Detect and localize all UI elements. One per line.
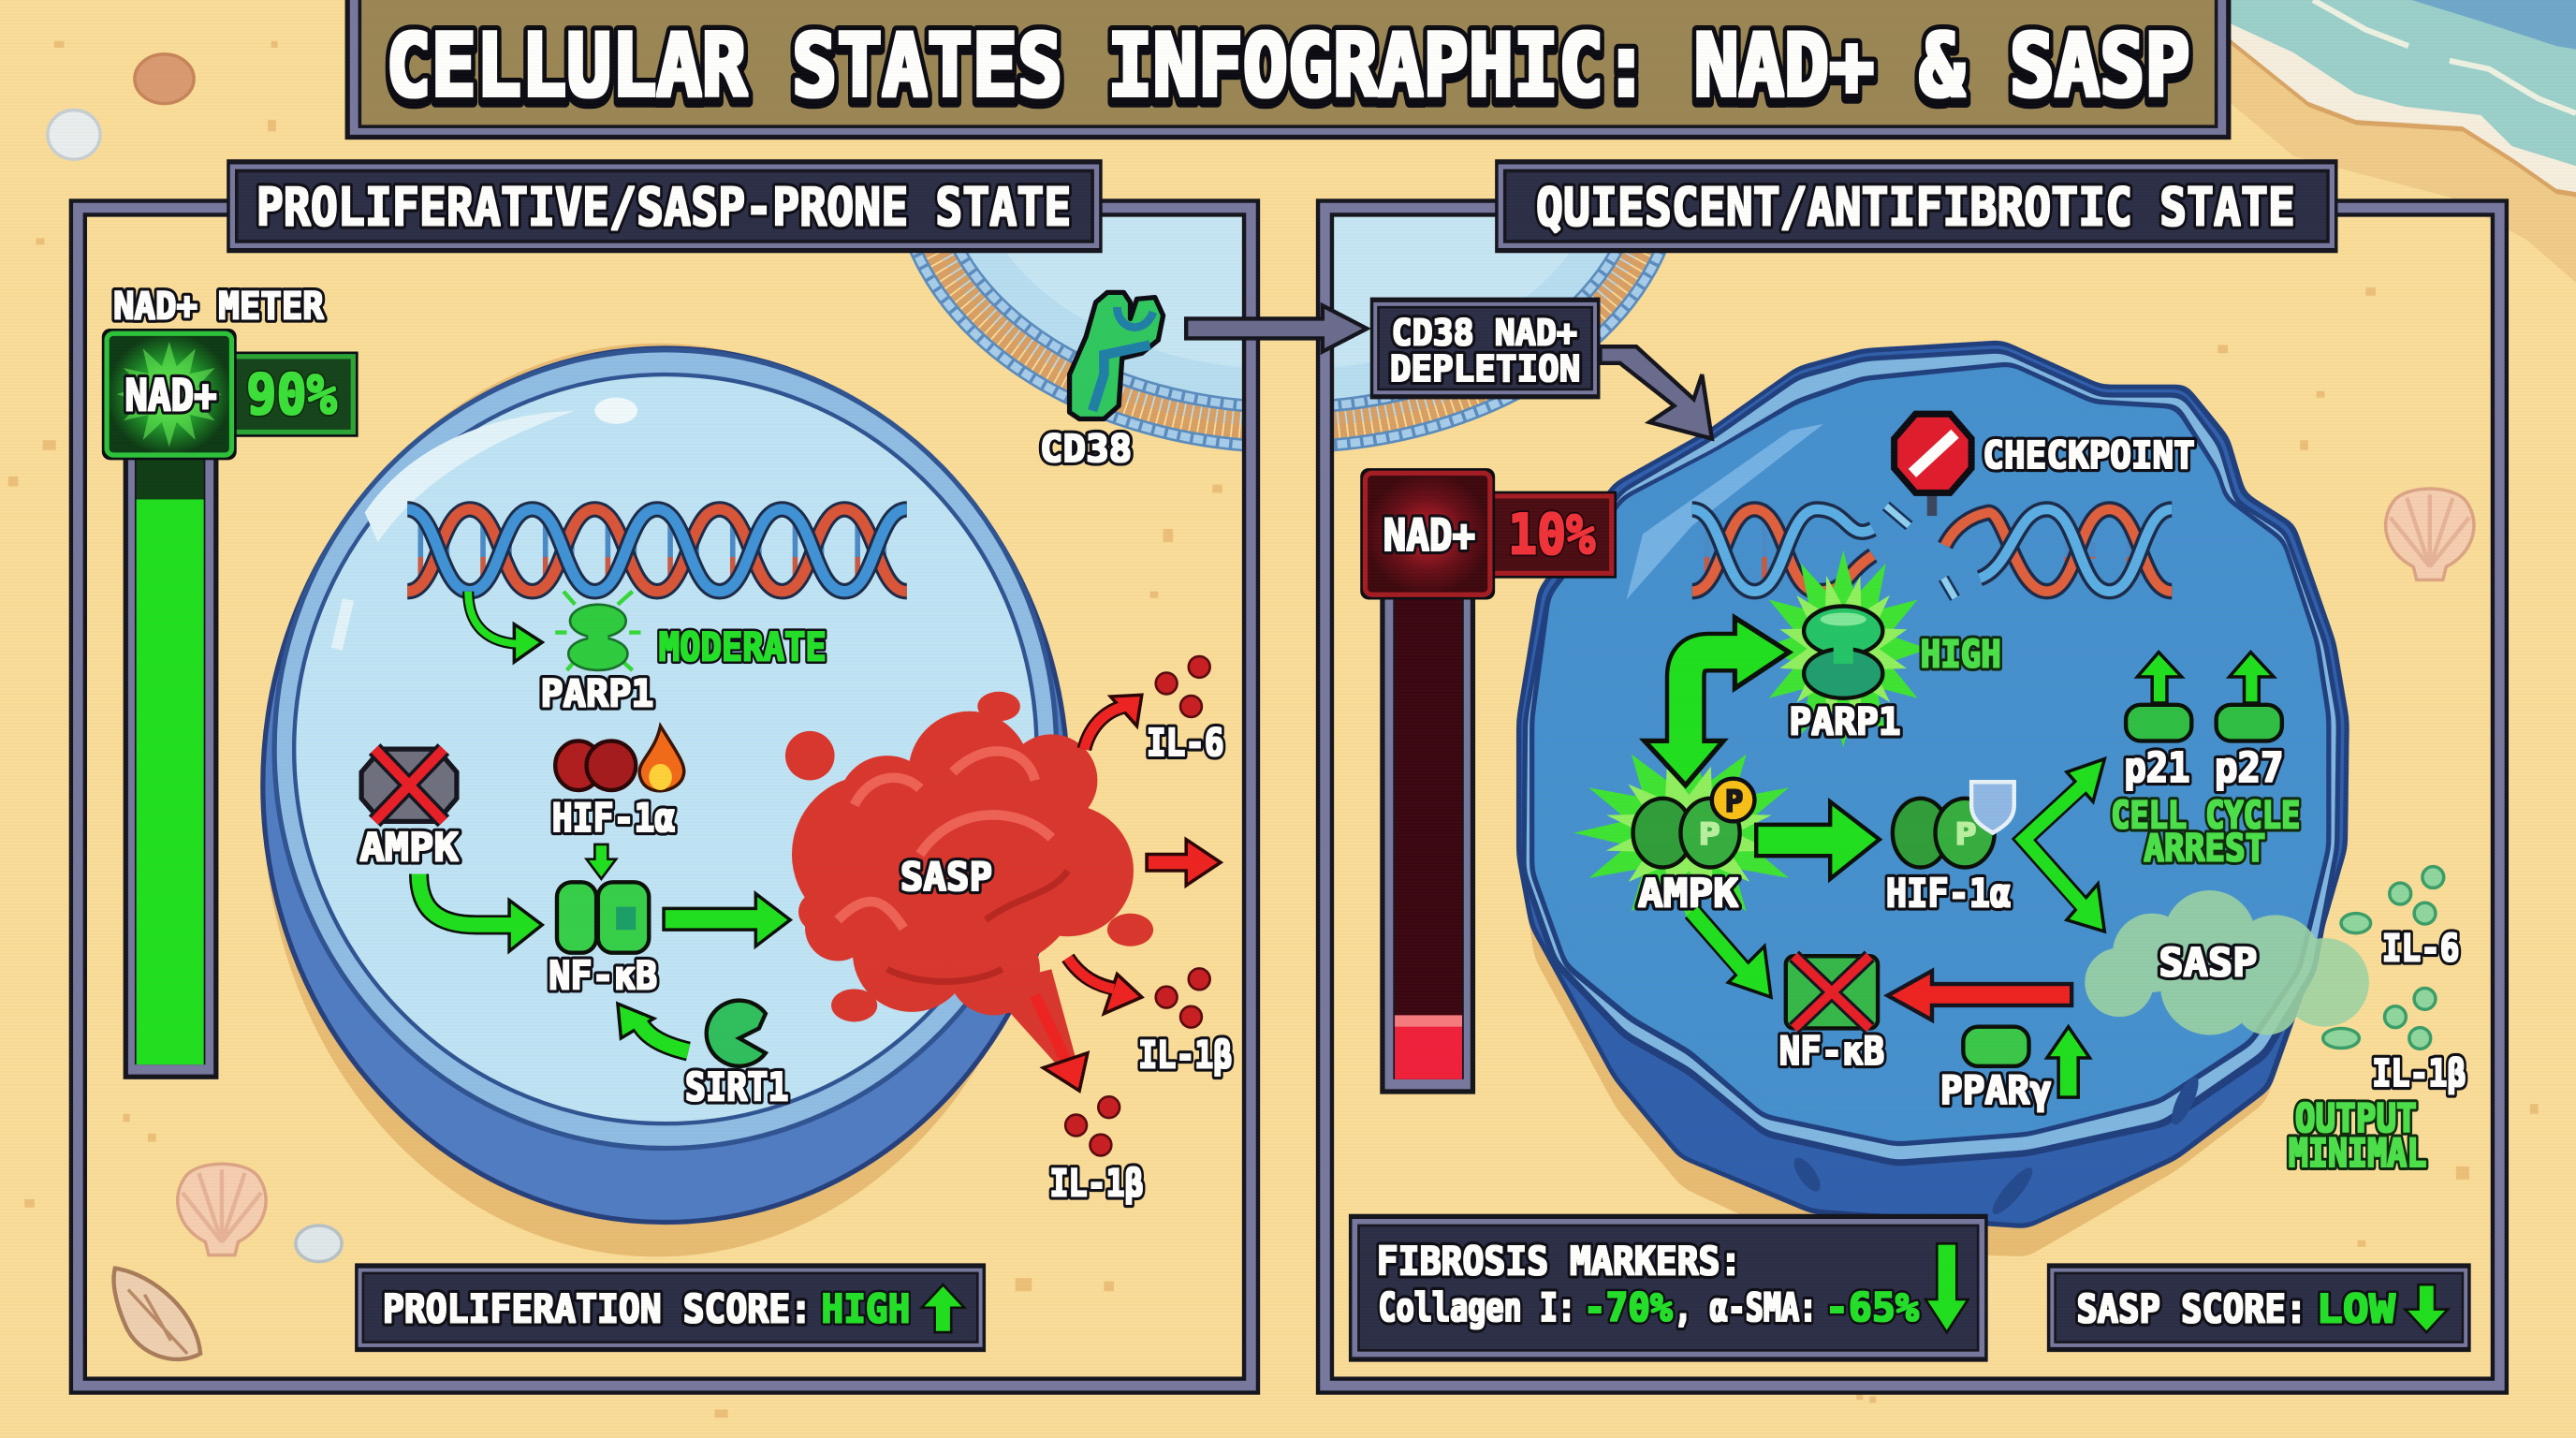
arrow: depletion to cell <box>1600 346 1712 439</box>
box: CD38 NAD+ depletion <box>1370 298 1600 399</box>
label: moderate: MODERATE <box>659 624 827 669</box>
header: proliferative: PROLIFERATIVE/SASP-PRONE STATE <box>256 177 1071 238</box>
box: fibrosis markers <box>1349 1214 1988 1362</box>
icon: down arrow <box>2405 1284 2448 1332</box>
icon: CD38 receptor <box>1070 292 1164 418</box>
arrow: DNA to PARP1 <box>468 592 542 662</box>
icon: NF-kB inhibited <box>1786 956 1878 1028</box>
label: SASP left: SASP <box>900 854 992 900</box>
arrow: CD38 to depletion <box>1186 305 1367 352</box>
label: SIRT1: SIRT1 <box>685 1064 788 1110</box>
arrow: HIF-1a branching <box>2024 759 2104 932</box>
label: IL-1b lower: IL-1β <box>1050 1161 1144 1205</box>
label: PARP1 left: PARP1 <box>540 672 654 716</box>
arrow: NF-kB to SASP <box>664 894 790 946</box>
NAD+ meter: low <box>1360 468 1617 1094</box>
arrow: SASP inhibits NF-kB <box>1888 971 2071 1020</box>
label: HIF-1a right: HIF-1α <box>1886 871 2011 917</box>
label: cell cycle arrest <box>2111 793 2300 870</box>
cytokine dots: IL-6 left <box>1156 656 1210 717</box>
icon: p21 with up arrow <box>2126 653 2191 741</box>
box: fibrosis markers: Collagen I: <box>1379 1284 1575 1330</box>
icon: HIF-1a with flame <box>555 726 684 791</box>
icon: up arrow <box>922 1284 964 1332</box>
icon: AMPK active with burst: P <box>1725 785 1743 819</box>
box: fibrosis markers: , α-SMA: <box>1674 1284 1817 1330</box>
label: NF-kB right: NF-κB <box>1779 1028 1884 1074</box>
box: CD38 NAD+ depletion: DEPLETION <box>1390 348 1580 390</box>
label: output minimal <box>2289 1095 2426 1176</box>
DNA: damaged helix <box>1692 506 2172 598</box>
arrow: SASP to IL-1b upper <box>1068 958 1142 1014</box>
arrow: HIF-1a to NF-kB <box>587 844 616 879</box>
pebble: brown <box>135 54 194 104</box>
label: PARP1 right: PARP1 <box>1789 699 1901 743</box>
box: SASP score <box>2047 1263 2471 1352</box>
neighbouring cell membrane with CD38 anchor <box>910 217 1666 451</box>
cytokine dots: IL-1b lower <box>1065 1096 1120 1155</box>
cytokine dots: IL-6 faint <box>2341 867 2444 933</box>
icon: p27 with up arrow <box>2217 653 2282 741</box>
icon: HIF-1a protected: P <box>1955 818 1976 852</box>
label: PPARg: PPARγ <box>1940 1067 2052 1113</box>
label: SASP right: SASP <box>2159 939 2258 985</box>
header: proliferative <box>227 159 1103 253</box>
arrow: SASP to IL-1b lower <box>1035 995 1088 1091</box>
label: cell cycle arrest: ARREST <box>2144 826 2265 870</box>
icon: AMPK active with burst: P <box>1699 818 1720 852</box>
label: IL-1b right: IL-1β <box>2372 1051 2466 1095</box>
icon: HIF-1a protected <box>1893 782 2014 867</box>
droplets <box>977 692 1020 721</box>
label: CD38: CD38 <box>1040 427 1132 471</box>
box: fibrosis markers: -65% <box>1825 1284 1920 1330</box>
label: NF-kB left: NF-κB <box>549 952 657 998</box>
arrow: AMPK and PARP1 feedback <box>1645 618 1789 785</box>
meter fill: 10% <box>1395 1015 1462 1079</box>
icon: down arrow <box>1925 1243 1969 1332</box>
header: quiescent <box>1495 159 2338 253</box>
shell: lower-left scallop <box>178 1164 266 1255</box>
box: proliferation score: HIGH <box>822 1286 910 1332</box>
box: CD38 NAD+ depletion: CD38 NAD+ <box>1392 312 1577 354</box>
DNA: intact helix <box>407 509 907 592</box>
icon: SIRT1 <box>707 1001 766 1066</box>
NAD+ meter: low: 10% <box>1508 503 1595 567</box>
icon: PPARg <box>1963 1027 2029 1066</box>
panel: proliferative state frame <box>78 208 1251 1386</box>
NAD+ meter: high: 90% <box>246 363 337 428</box>
arrow: AMPK to HIF-1a <box>1756 801 1880 879</box>
NAD+ meter: high: NAD+ METER <box>113 284 324 328</box>
box: SASP score: LOW <box>2317 1286 2396 1332</box>
arrow: SIRT1 to NF-kB <box>618 1004 688 1051</box>
label: AMPK right: AMPK <box>1638 871 1739 917</box>
label: p27: p27 <box>2215 744 2284 792</box>
cytokine dots: IL-1b upper <box>1156 968 1210 1028</box>
label: output minimal: OUTPUT <box>2295 1095 2417 1141</box>
NAD+ meter: high <box>102 284 359 1079</box>
box: proliferation score <box>355 1263 986 1352</box>
shell: conch <box>114 1269 200 1359</box>
label: IL-1b upper: IL-1β <box>1138 1034 1232 1078</box>
title text: CELLULAR STATES INFOGRAPHIC: NAD+ & SASP <box>386 15 2190 116</box>
arrow: AMPK to NF-kB <box>419 874 542 951</box>
cytokine dots: IL-1b faint <box>2323 988 2436 1049</box>
SASP faint cloud <box>2085 890 2369 1034</box>
panel: proliferating round cell <box>263 344 1068 1256</box>
shell: right scallop <box>2386 489 2474 580</box>
icon: PARP1 moderate <box>555 592 640 670</box>
header: quiescent: QUIESCENT/ANTIFIBROTIC STATE <box>1536 177 2295 238</box>
icon: PARP1 high with burst <box>1758 550 1928 747</box>
label: IL-6 left: IL-6 <box>1147 721 1224 765</box>
NAD+ meter: low: NAD+ <box>1383 510 1475 562</box>
label: high: HIGH <box>1921 632 2001 676</box>
panel: quiescent irregular cell <box>1516 340 2349 1256</box>
label: AMPK left: AMPK <box>359 824 459 870</box>
icon: shield <box>1971 782 2014 833</box>
icon: NF-kB dimer <box>557 882 649 953</box>
icon: AMPK inactive <box>361 749 457 821</box>
arrow: PPARg up <box>2047 1027 2089 1097</box>
label: checkpoint: CHECKPOINT <box>1983 433 2195 477</box>
box: SASP score: SASP SCORE: <box>2076 1286 2306 1332</box>
title banner <box>345 0 2231 139</box>
icon: checkpoint stop sign <box>1895 414 1971 516</box>
NAD+ meter: high: NAD+ <box>124 371 217 422</box>
arrow: SASP to IL-6 <box>1084 695 1142 749</box>
pebble: white <box>48 110 100 159</box>
label: HIF-1a left: HIF-1α <box>552 795 675 841</box>
box: proliferation score: PROLIFERATION SCORE: <box>383 1286 812 1332</box>
label: p21: p21 <box>2124 744 2190 792</box>
meter fill: 90% <box>137 499 204 1064</box>
arrow: SASP right output <box>1147 840 1221 886</box>
icon: AMPK active with burst <box>1573 742 1804 923</box>
pebble: small white <box>296 1225 342 1262</box>
arrow: AMPK to inhibited NF-kB <box>1692 912 1771 997</box>
panel: quiescent state frame <box>1325 208 2499 1386</box>
label: IL-6 right: IL-6 <box>2382 927 2459 971</box>
SASP burst cloud <box>785 692 1153 1068</box>
box: fibrosis markers: -70% <box>1584 1284 1673 1330</box>
box: fibrosis markers: FIBROSIS MARKERS: <box>1377 1239 1741 1284</box>
label: cell cycle arrest: CELL CYCLE <box>2111 793 2300 837</box>
ocean corner <box>2202 0 2576 283</box>
label: output minimal: MINIMAL <box>2289 1130 2426 1176</box>
